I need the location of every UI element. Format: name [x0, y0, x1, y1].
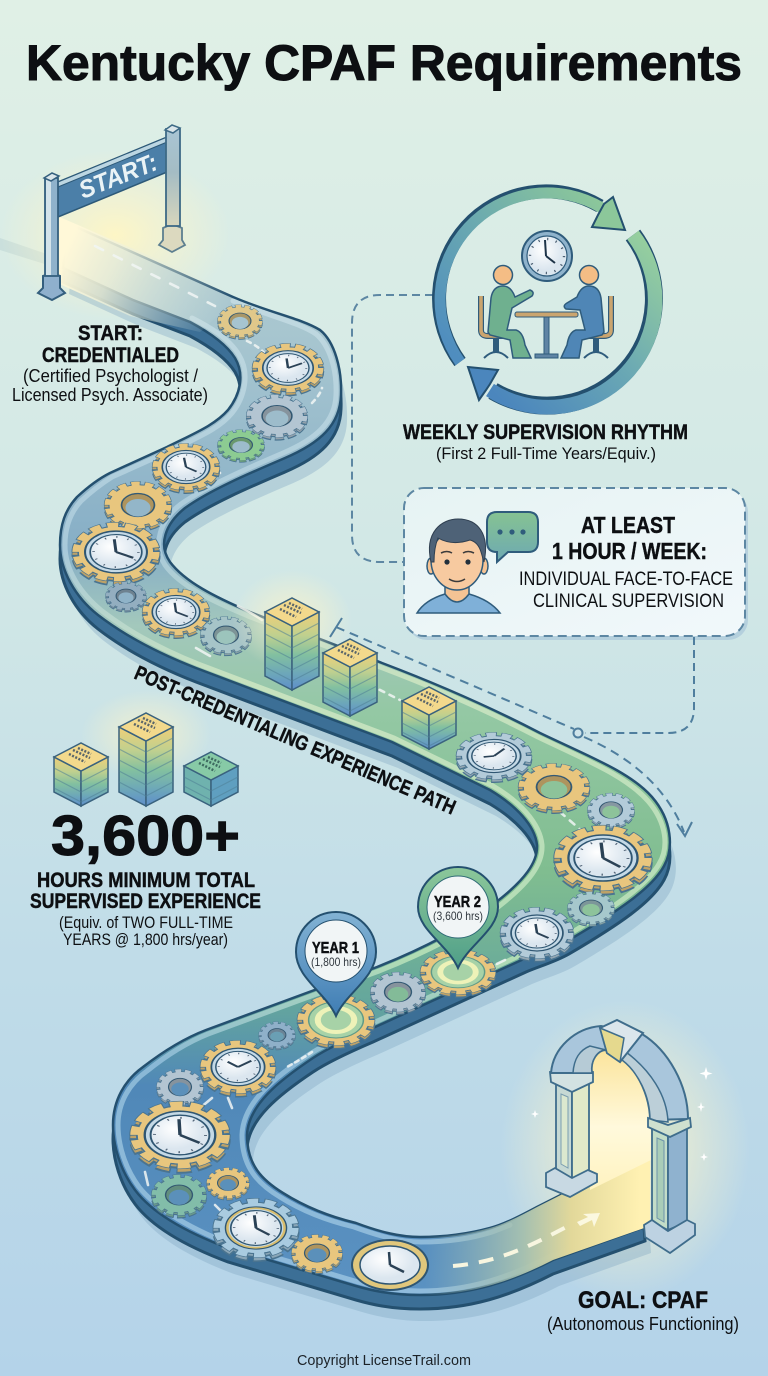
goal label — [547, 1287, 739, 1334]
pin: year 2: YEAR 2 — [434, 894, 481, 911]
cycle arrow: blue to green — [439, 191, 625, 362]
gear: gold small — [209, 1169, 247, 1199]
hour stacks on road — [265, 598, 456, 749]
big number: 3,600+ — [51, 804, 240, 868]
gear: grey — [249, 397, 305, 438]
panel body — [519, 569, 733, 612]
gate right post — [159, 125, 185, 252]
clock gear — [256, 346, 320, 393]
stack 2 — [323, 639, 377, 716]
glow behind hours stacks — [81, 690, 211, 780]
gate left post — [38, 173, 65, 300]
gear: green — [220, 431, 262, 461]
hours text: HOURS MINIMUM TOTAL — [37, 869, 255, 892]
gear: steel small — [260, 1023, 294, 1049]
rhythm subheading: (First 2 Full-Time Years/Equiv.) — [436, 444, 656, 463]
rhythm heading: WEEKLY SUPERVISION RHYTHM — [403, 421, 688, 444]
winding road path — [60, 223, 676, 1321]
road end light fade — [420, 1155, 650, 1295]
copyright: Copyright LicenseTrail.com — [297, 1352, 471, 1369]
stack right — [184, 752, 238, 806]
goal label: (Autonomous Functioning) — [547, 1314, 739, 1334]
clock gear — [156, 446, 216, 491]
start label: START: — [78, 322, 143, 345]
goal glow — [500, 1000, 750, 1300]
hours stacks icon — [54, 713, 238, 806]
gate sign — [58, 135, 172, 217]
gear: gold small — [294, 1236, 340, 1272]
gear: gold — [522, 766, 586, 811]
gear: grey small — [108, 583, 144, 611]
road edge highlight bands — [65, 301, 665, 1291]
arch right pillar — [644, 1118, 695, 1253]
panel headline — [552, 512, 707, 564]
sparkles — [531, 1067, 712, 1161]
stack left — [54, 743, 108, 806]
clock gear: large — [559, 829, 647, 892]
pin: year 1 — [296, 912, 376, 1016]
right person at table — [561, 266, 611, 358]
panel body: CLINICAL SUPERVISION — [533, 591, 724, 612]
final clock — [351, 1239, 429, 1291]
gear: teal — [570, 893, 612, 925]
hours text: YEARS @ 1,800 hrs/year) — [63, 930, 228, 949]
stack 1 — [265, 598, 319, 690]
gear: gold small — [220, 306, 260, 338]
start label — [12, 322, 208, 405]
clock gear — [204, 1043, 272, 1095]
clock gear — [146, 591, 206, 636]
dashed connector: rhythm to panel — [352, 295, 433, 562]
gear: teal grey — [203, 618, 249, 654]
start label: Licensed Psych. Associate) — [12, 385, 208, 405]
pin: year 1: (1,800 hrs) — [311, 955, 361, 969]
hours text: (Equiv. of TWO FULL-TIME — [59, 913, 233, 932]
start label: (Certified Psychologist / — [23, 366, 198, 386]
curved path label: POST-CREDENTIALING EXPERIENCE PATH — [131, 661, 459, 819]
clock gear: large — [76, 525, 156, 583]
road start light fade — [55, 215, 240, 332]
pin: year 2 — [418, 867, 498, 968]
start label: CREDENTIALED — [42, 344, 179, 367]
pin: year 2: (3,600 hrs) — [433, 909, 483, 923]
panel body: INDIVIDUAL FACE-TO-FACE — [519, 569, 733, 590]
arch opening light — [590, 1050, 651, 1190]
gear: grey small — [590, 795, 632, 827]
final road dashes and arrow — [453, 1213, 600, 1266]
pin: year 1: YEAR 1 — [312, 940, 359, 957]
arch left pillar — [546, 1072, 597, 1197]
wall clock — [522, 231, 572, 281]
gate sign: START: — [75, 148, 161, 205]
panel headline: AT LEAST — [581, 512, 676, 538]
panel: one hour per week — [404, 488, 748, 640]
hours text — [30, 869, 261, 949]
milestone gear: year 2 — [424, 952, 492, 995]
clock gear: steel — [460, 735, 528, 780]
milestone gear: year 1 — [301, 997, 371, 1046]
dashed path arrow — [330, 618, 692, 836]
gear: grey — [159, 1071, 201, 1106]
clock gear: largest — [135, 1105, 225, 1170]
stack 3 — [402, 687, 456, 749]
gear: grey — [373, 974, 423, 1013]
gear: gold — [108, 484, 168, 529]
table — [515, 312, 578, 358]
upper road gears and clocks — [76, 306, 320, 654]
start gate — [38, 125, 185, 300]
road glow behind stacks — [232, 570, 352, 670]
icon: speech bubble — [487, 512, 538, 562]
clock gear: steel — [504, 910, 570, 960]
start glow — [0, 150, 230, 320]
left person at table — [481, 266, 533, 358]
lower road gears and clocks — [135, 1023, 429, 1291]
clock gear: steel gold — [217, 1201, 295, 1259]
cycle arrow: green to blue — [468, 235, 655, 407]
weekly rhythm icon — [439, 191, 655, 407]
goal arch — [531, 1020, 712, 1253]
faint ground shadow — [0, 238, 70, 272]
arch keystone — [600, 1020, 643, 1062]
dashed connector: panel to road — [574, 637, 694, 738]
middle road gears and clocks — [301, 735, 647, 1046]
gear: teal — [154, 1177, 204, 1216]
arch curve — [551, 1026, 688, 1122]
panel headline: 1 HOUR / WEEK: — [552, 538, 707, 564]
title: Kentucky CPAF Requirements — [26, 35, 742, 91]
goal label: GOAL: CPAF — [578, 1287, 708, 1314]
hours text: SUPERVISED EXPERIENCE — [30, 890, 261, 913]
icon: supervisor bust — [417, 519, 500, 613]
stack centre — [119, 713, 173, 806]
road centre dashes — [95, 246, 590, 1212]
